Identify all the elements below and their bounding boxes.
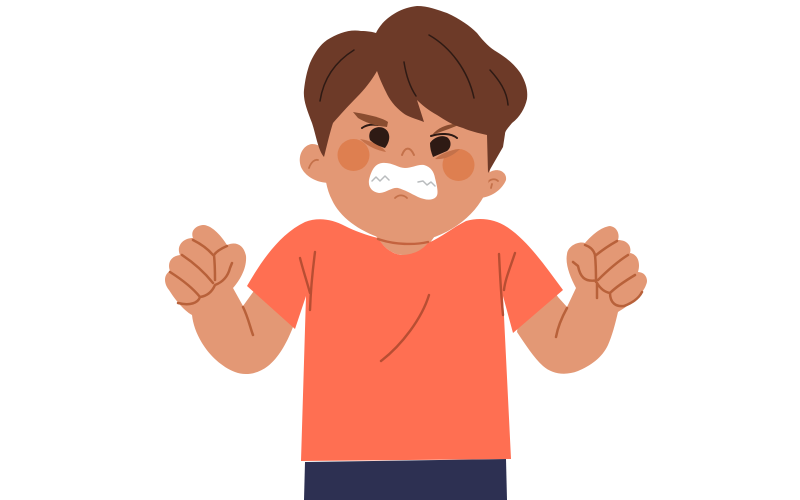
- hair strands: [320, 35, 508, 105]
- shirt: [247, 219, 563, 461]
- left ear: [300, 144, 330, 183]
- hair: [304, 6, 527, 173]
- nose: [402, 149, 414, 155]
- neck: [360, 215, 450, 255]
- right arm and fist: [517, 226, 647, 374]
- eyelashes: [362, 125, 457, 138]
- neckline: [378, 239, 428, 244]
- left arm and fist: [165, 225, 293, 374]
- right fist creases: [556, 241, 642, 337]
- right eye: [430, 136, 451, 157]
- cheeks: [338, 139, 370, 171]
- eye lids: [360, 139, 386, 152]
- left fist creases: [170, 240, 253, 335]
- right ear: [478, 170, 506, 198]
- face: [324, 65, 491, 244]
- left eyebrow: [353, 112, 388, 127]
- trousers: [304, 459, 507, 500]
- left eye: [369, 127, 389, 148]
- shirt folds: [300, 252, 515, 361]
- right eyebrow: [432, 122, 463, 135]
- mouth: [369, 163, 438, 200]
